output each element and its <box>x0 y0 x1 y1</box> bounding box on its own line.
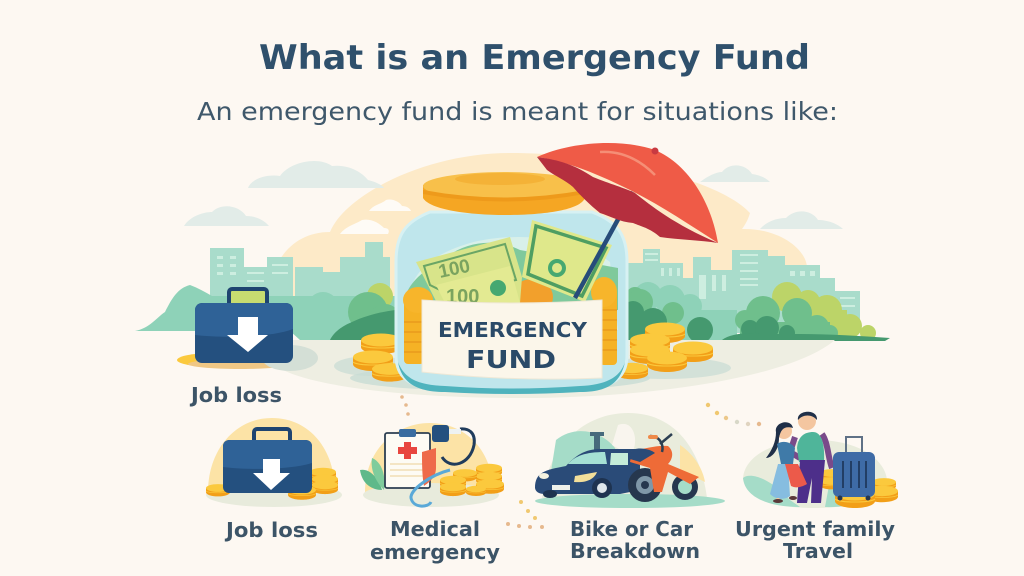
banknote left: 100 <box>446 286 479 308</box>
mid green bushes <box>348 287 838 341</box>
background scene: sun, clouds, skyline, bushes, ground <box>135 153 890 398</box>
icon: red umbrella <box>537 143 718 243</box>
panel: urgent family travel <box>735 412 898 563</box>
jar label <box>422 300 602 379</box>
suitcase <box>833 437 875 500</box>
label: Urgent family <box>735 517 895 541</box>
backdrop <box>542 413 707 498</box>
jar lid <box>423 172 585 215</box>
shield <box>422 448 436 486</box>
jar with money <box>396 172 633 394</box>
panel: job loss <box>206 418 342 542</box>
backdrop <box>743 440 887 508</box>
banknote right <box>522 220 612 302</box>
panel: urgent family travel: Travel <box>783 539 853 563</box>
banknote left: 100 <box>437 256 472 283</box>
ground <box>275 340 835 398</box>
jar label: FUND <box>466 345 556 374</box>
motorcycle <box>628 434 699 502</box>
plant <box>360 458 384 490</box>
skyline windows <box>217 253 855 307</box>
dark green band <box>330 301 890 343</box>
panel: bike or car breakdown: Breakdown <box>570 539 700 563</box>
label: Medical <box>390 517 480 541</box>
label: job loss (upper): Job loss <box>189 383 282 407</box>
decorative path dots <box>400 395 761 529</box>
jar label: EMERGENCY <box>438 318 588 342</box>
coins <box>820 469 898 508</box>
jar glass <box>396 212 627 391</box>
stethoscope <box>411 425 474 506</box>
icon: coins left of jar <box>353 334 408 382</box>
lime bushes <box>367 282 876 341</box>
skyline <box>210 242 860 333</box>
clipboard <box>385 429 430 488</box>
teal bushes, right <box>627 282 737 340</box>
car <box>535 432 640 498</box>
umbrella pole <box>575 192 633 298</box>
coins <box>206 468 338 500</box>
label: Job loss <box>224 518 318 542</box>
woman <box>766 422 807 503</box>
coins <box>440 464 504 496</box>
label: Bike or Car <box>570 517 693 541</box>
panel: medical emergency <box>360 423 504 564</box>
panel: medical emergency: emergency <box>370 540 500 564</box>
icon: briefcase, job loss (upper) <box>177 289 318 371</box>
jar base rim <box>398 362 625 394</box>
title: What is an Emergency Fund <box>259 38 810 78</box>
panel: bike or car breakdown <box>535 413 725 563</box>
man <box>790 412 832 503</box>
icon: coins right of jar <box>616 322 713 379</box>
subtitle: An emergency fund is meant for situations like: <box>197 97 838 126</box>
coins in jar <box>403 277 617 365</box>
backdrop <box>208 418 335 492</box>
teal hills and bushes, left <box>135 285 395 340</box>
banknote left <box>416 237 522 308</box>
briefcase <box>223 429 312 493</box>
backdrop <box>365 423 493 492</box>
